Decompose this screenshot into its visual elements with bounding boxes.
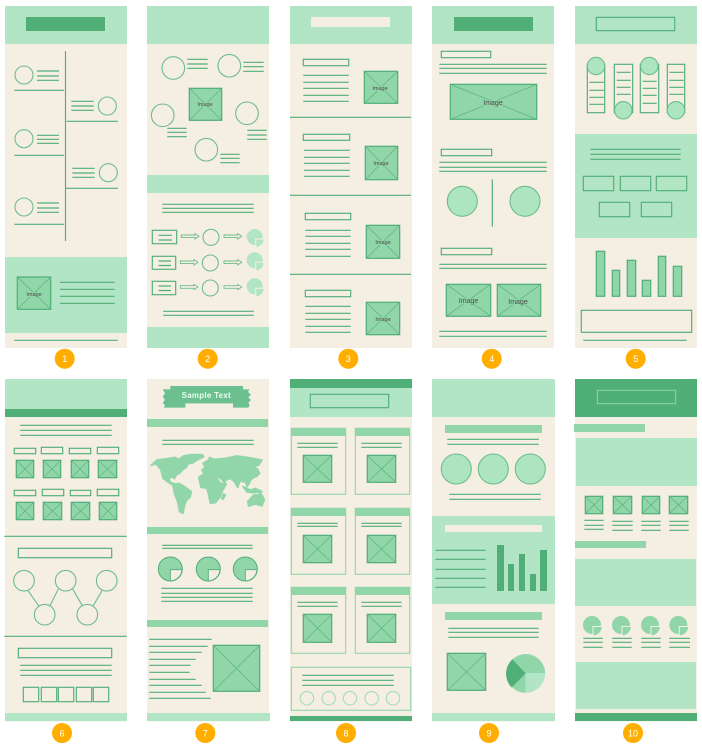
- intro lines: [4, 425, 127, 675]
- mid band 9: [432, 516, 555, 604]
- panel: layout 7: [147, 379, 270, 722]
- heading boxes: [441, 51, 492, 255]
- card images: [303, 455, 396, 642]
- network diagram: [14, 570, 117, 625]
- ribbon banner: Sample Text: [182, 391, 231, 400]
- image left: Image: [459, 298, 478, 305]
- panel: layout 1: [5, 6, 127, 348]
- footer band 2: [147, 327, 269, 348]
- badge 10: [623, 723, 643, 743]
- section heading boxes: [303, 59, 351, 297]
- flow pies: [247, 229, 264, 297]
- header band 8: [290, 388, 412, 417]
- footer strip 8: [290, 716, 412, 721]
- caption box: [581, 310, 692, 332]
- bottom box: [291, 667, 411, 710]
- panel: layout 8: [290, 379, 412, 722]
- flow arrows: [180, 234, 242, 290]
- heading boxes 6: [18, 548, 112, 658]
- timeline item text lines: [14, 71, 118, 224]
- bottom box lines: [302, 675, 394, 685]
- header band 5: [575, 6, 697, 44]
- image row captions: [584, 520, 689, 530]
- panel: layout 10: [574, 379, 697, 722]
- header band 9: [432, 379, 555, 417]
- header band 1: [5, 6, 127, 44]
- timeline axis: [64, 51, 66, 241]
- panel: layout 9: [432, 379, 555, 722]
- mid band 5: [575, 134, 697, 238]
- badge 5: 5: [633, 354, 638, 364]
- card frames: [291, 428, 410, 653]
- three circles: [441, 454, 545, 484]
- pill circles: [587, 57, 685, 119]
- image placeholder C: [366, 225, 400, 258]
- footer band 9: [432, 713, 555, 721]
- text lines: [162, 204, 254, 315]
- image placeholder D: [366, 302, 400, 335]
- badge 1: [55, 349, 75, 369]
- badge 9: [479, 723, 499, 743]
- text lines: [439, 64, 547, 336]
- footer band 6: [5, 713, 127, 721]
- image row 10: [585, 496, 688, 514]
- title bar 3: [311, 17, 390, 27]
- card headers: [291, 428, 410, 595]
- badge 5: [626, 349, 646, 369]
- pie row 10: [583, 616, 689, 636]
- header band 2: [147, 6, 269, 44]
- heading strip bottom: [445, 612, 542, 620]
- top strip 8: [290, 379, 412, 388]
- panel: layout 2: [147, 6, 269, 348]
- panel: layout 6: [4, 379, 127, 722]
- title box 8: [310, 394, 389, 408]
- bar chart 9: [497, 545, 547, 591]
- image right: Image: [508, 299, 528, 306]
- mid band lines: [435, 550, 486, 587]
- pie row captions: [583, 638, 690, 647]
- badge 10: 10: [628, 728, 638, 738]
- badge 2: 2: [205, 354, 210, 364]
- band text lines: [14, 282, 118, 340]
- card text lines: [297, 443, 402, 606]
- title bar 1: [26, 17, 105, 31]
- pie charts 7: [158, 557, 257, 581]
- image right: [497, 284, 541, 316]
- image placeholder A: [364, 71, 398, 103]
- image left: [446, 284, 491, 316]
- center image: Image: [197, 102, 213, 108]
- badge 1: 1: [62, 354, 67, 364]
- text lines 7: [149, 440, 254, 698]
- bar chart: [596, 251, 682, 296]
- wide image: [450, 84, 537, 119]
- lower band 1: [5, 257, 127, 333]
- panel: layout 5: [575, 6, 697, 348]
- header band 4: [432, 6, 554, 44]
- badge 8: 8: [343, 728, 349, 738]
- square row: [23, 687, 109, 702]
- footer strip 10: [575, 713, 697, 721]
- heading strip mid: [445, 525, 542, 532]
- badge 3: 3: [346, 354, 351, 364]
- badge 7: 7: [203, 728, 208, 738]
- title box 5: [596, 17, 675, 31]
- badge 4: 4: [489, 354, 494, 364]
- wide image: Image: [483, 100, 503, 107]
- pill lines: [589, 72, 684, 104]
- panel: layout 3: [290, 6, 412, 348]
- badge 9: 9: [486, 728, 492, 738]
- center image: [189, 88, 222, 120]
- flow row boxes: [152, 230, 177, 295]
- top lines: [447, 439, 541, 499]
- filled circles: [447, 186, 540, 216]
- bottom lines: [448, 628, 539, 637]
- image placeholder: [17, 277, 51, 309]
- ring circles: [151, 54, 258, 161]
- large image: [213, 645, 260, 691]
- divider band: [147, 175, 269, 193]
- pie chart 9: [506, 654, 545, 693]
- badge 7: [195, 723, 215, 743]
- image placeholder B: Image: [373, 161, 389, 167]
- badge 4: [482, 349, 502, 369]
- content blocks 10: [575, 438, 697, 709]
- badge 6: [52, 723, 72, 743]
- header band 3: [290, 6, 412, 44]
- footer band 7: [147, 713, 270, 721]
- title box 10: [597, 390, 676, 404]
- band lines: [590, 149, 681, 159]
- ribbon banner: [163, 386, 251, 408]
- band boxes: [583, 176, 687, 217]
- image placeholder A: Image: [372, 86, 388, 92]
- image placeholder D: Image: [375, 317, 391, 323]
- image 9: [447, 653, 486, 690]
- badge 2: [198, 349, 218, 369]
- flow row box lines: [158, 235, 172, 290]
- timeline item circles: [15, 66, 117, 216]
- world map: [151, 455, 264, 513]
- section text lines and dividers: [290, 75, 411, 332]
- title bar 4: [454, 17, 533, 31]
- badge 8: [336, 723, 356, 743]
- badge 6: 6: [59, 728, 65, 738]
- ring text lines: [167, 59, 267, 163]
- image grid: [16, 460, 117, 520]
- section strips: [147, 419, 268, 627]
- section strips 10: [574, 424, 646, 548]
- flow circles: [202, 229, 219, 296]
- heading strip top: [445, 425, 542, 433]
- badge 3: [338, 349, 358, 369]
- image placeholder B: [365, 146, 398, 180]
- small label boxes: [14, 447, 119, 496]
- header strip 6: [5, 409, 127, 417]
- bottom box circles: [300, 692, 400, 705]
- header band 6: [5, 379, 127, 409]
- header band 10: [575, 379, 697, 417]
- pill columns: [587, 64, 685, 113]
- footer line: [583, 339, 687, 341]
- panel: layout 4: [432, 6, 554, 348]
- image placeholder: Image: [26, 292, 42, 298]
- image placeholder C: Image: [375, 240, 391, 246]
